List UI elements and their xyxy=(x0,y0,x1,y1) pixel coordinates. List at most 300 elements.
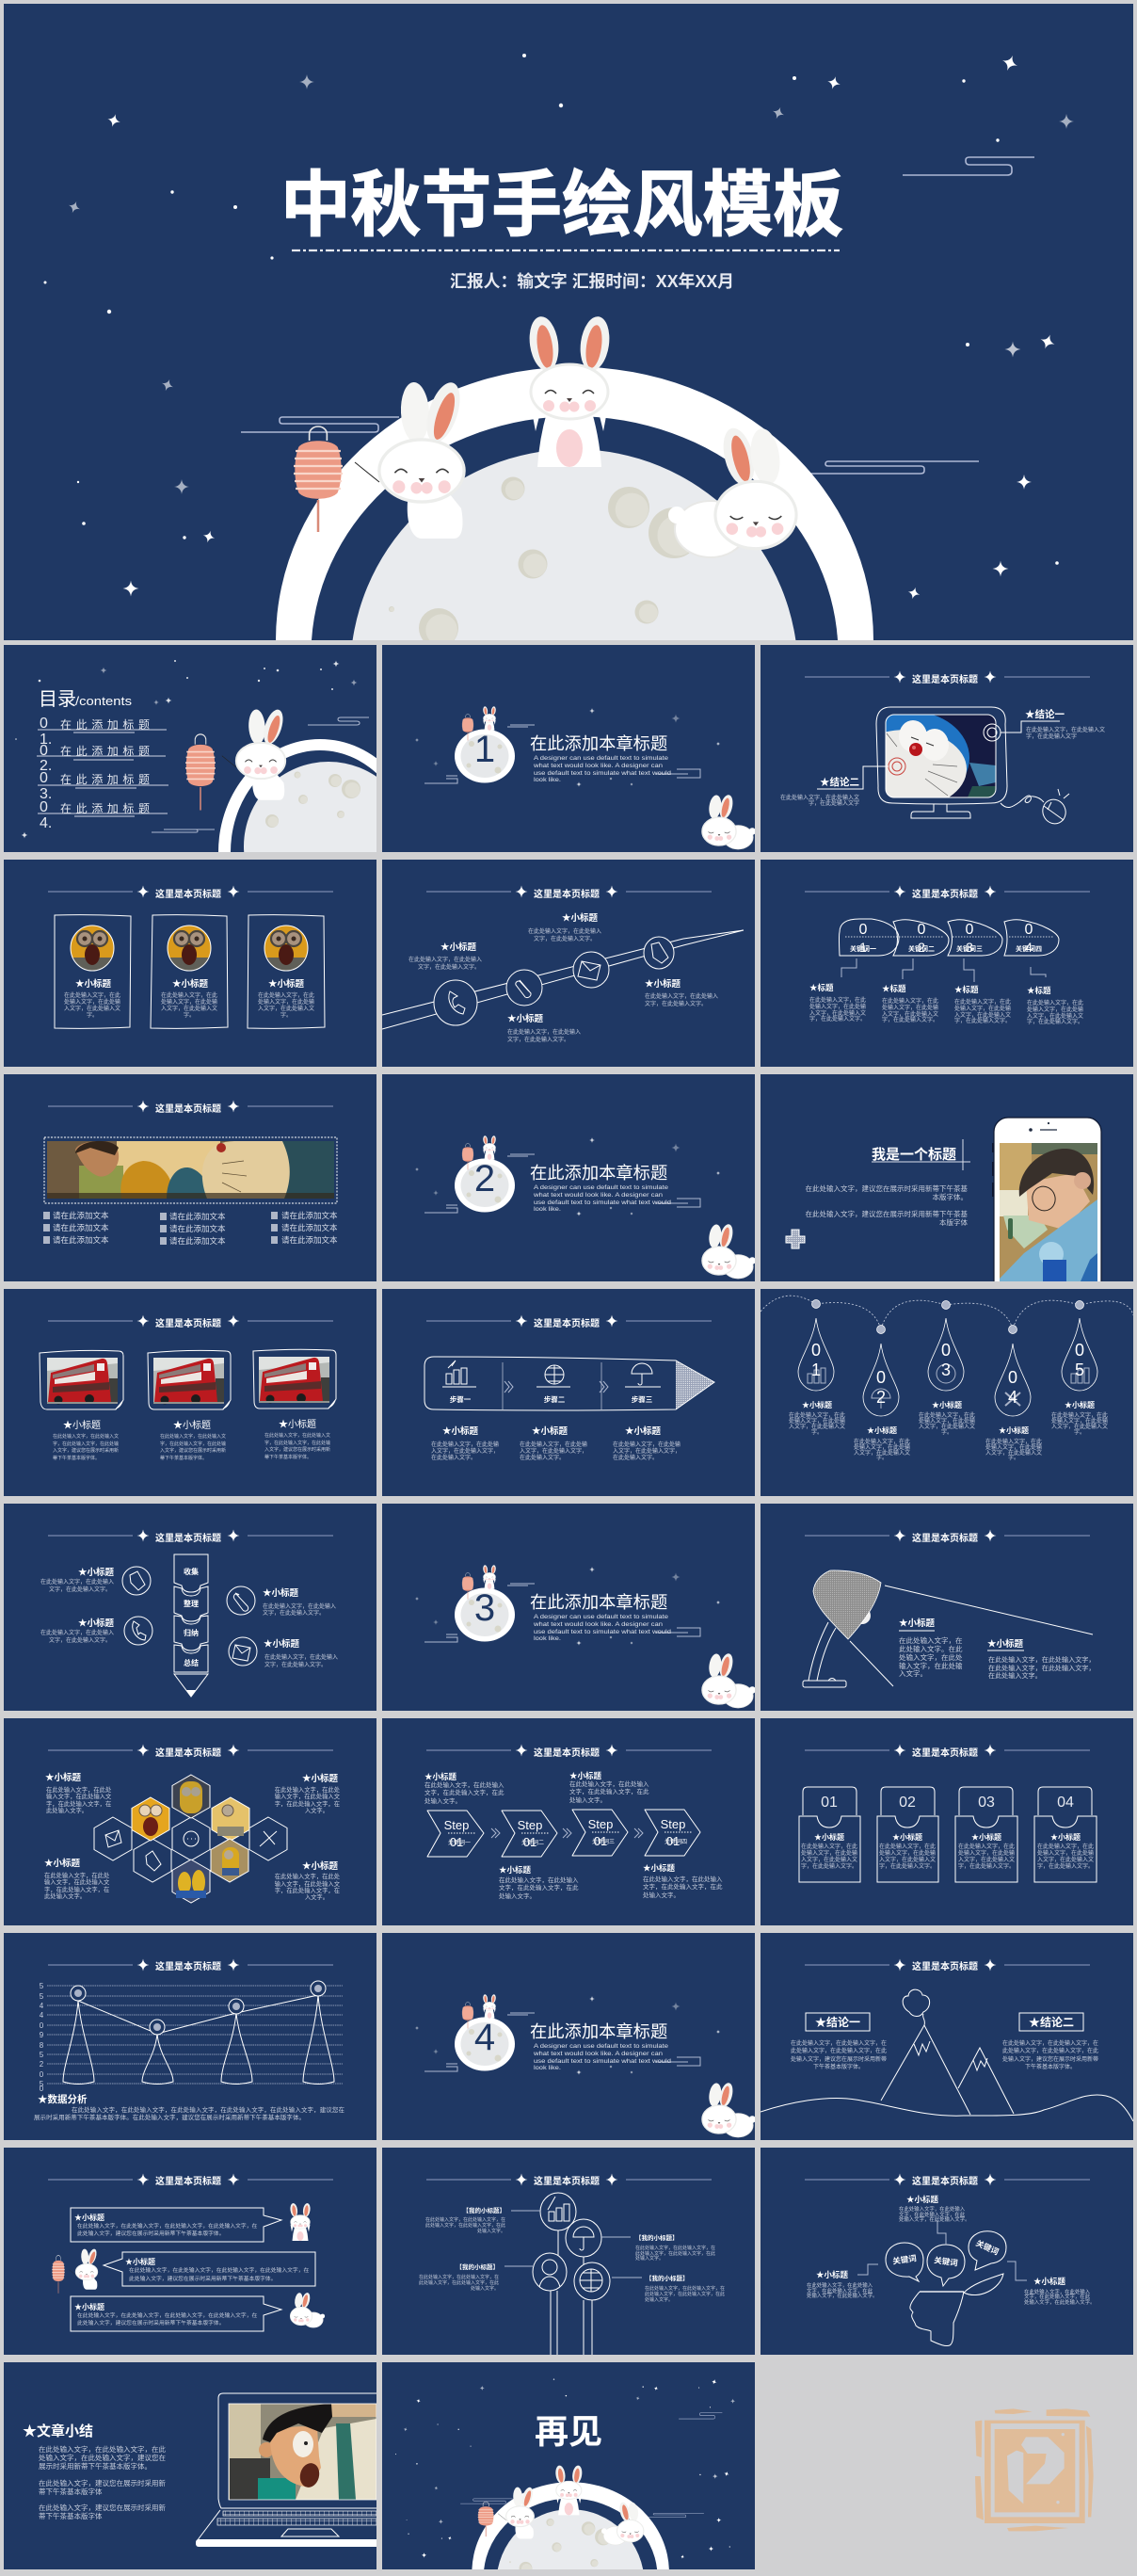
panel: contents xyxy=(4,645,376,852)
summary paragraph 3: 在此处输入文字，建议您在展示时采用新 xyxy=(39,2503,166,2512)
card 1: 字。 xyxy=(87,1011,98,1019)
pocket 4 xyxy=(1034,1787,1097,1882)
keyword bubble 1 xyxy=(886,2243,923,2281)
text block: left: ★小标题 xyxy=(816,2270,849,2279)
text block 1: 文字，在此处输入文字，在此 xyxy=(424,1788,504,1796)
tab labels: 关键词四 xyxy=(1016,944,1042,953)
bullet list: 请在此添加文本 xyxy=(169,1212,226,1221)
label 3 xyxy=(419,2262,499,2292)
tab labels: 0 xyxy=(859,922,868,938)
title dashed line xyxy=(292,250,840,251)
text block 4 xyxy=(643,1863,723,1899)
text block 2: 字，在此处输入文字。 xyxy=(882,1016,938,1023)
heading: 这里是本页标题 xyxy=(912,1960,978,1972)
text block 2 xyxy=(569,1771,649,1804)
heading: 这里是本页标题 xyxy=(155,1317,221,1329)
step 1 text: 入文字，在此处输入文字， xyxy=(431,1447,499,1455)
bubble 1: 在此处输入文字，在此处输入文字，在此处输入文字，在此处输入文字，在 xyxy=(77,2222,258,2230)
callout: conclusion one: 在此处输入文字，在此处输入文 xyxy=(1026,726,1105,733)
conclusion one: 此处输入文字，在此处输入文字，在此 xyxy=(791,2047,887,2054)
section title and description: use default text to simulate what text would xyxy=(534,1199,671,1206)
data analysis text: 展示时采用新蒂下午茶基本版字体。在此处输入文字，建议您在展示时采用新蒂下午茶基本版字体。 xyxy=(34,2113,305,2121)
text block 3: 处输入文字。 xyxy=(499,1892,536,1900)
text block 3: 字，在此处输入文字。 xyxy=(954,1017,1011,1024)
heading xyxy=(805,2173,1090,2187)
panel: hexagon gallery xyxy=(4,1718,376,1925)
cones xyxy=(63,1995,334,2085)
drop 4: 4 xyxy=(1008,1388,1017,1407)
panel: section 3 xyxy=(382,1504,756,1711)
gridlines xyxy=(47,1986,343,2084)
tab labels: 关键词二 xyxy=(908,944,935,953)
caption 3 xyxy=(264,1419,330,1460)
section number: 4 xyxy=(474,2017,495,2058)
caption 3: 入文字，在此处输入文 xyxy=(919,1423,975,1430)
bubble 1 xyxy=(71,2208,281,2242)
text paragraph 1 xyxy=(806,1183,968,1201)
text block 4: ★标题 xyxy=(1027,986,1051,995)
pocket 1: ★小标题 xyxy=(814,1832,844,1842)
step 2 text: 在此处输入文字，在此处输 xyxy=(520,1441,587,1448)
closing illustration xyxy=(382,2362,755,2576)
pocket 2: 02 xyxy=(899,1795,916,1811)
y axis labels: 9 xyxy=(40,2031,44,2039)
caption 2: 处输入文字，在此处输 xyxy=(854,1443,910,1451)
caption 2 xyxy=(160,1420,226,1461)
caption 1 xyxy=(53,1420,119,1461)
trend line xyxy=(78,1995,318,2034)
summary paragraph 2: 蒂下午茶基本版字体 xyxy=(39,2487,103,2496)
label 3: 【我的小标题】 xyxy=(456,2262,499,2271)
contents list: 在此添加标题 xyxy=(60,802,150,815)
section title and description: 在此添加本章标题 xyxy=(530,1592,667,1612)
photo xyxy=(47,1141,334,1199)
step chevron 4: 01 xyxy=(666,1834,680,1848)
bullet list: 请在此添加文本 xyxy=(281,1223,338,1232)
text block 4: 在此处输入文字，在此 xyxy=(1027,999,1083,1006)
tab labels: 关键词一 xyxy=(850,944,876,953)
clouds xyxy=(152,717,369,832)
caption 3 xyxy=(919,1400,975,1436)
pencil shape xyxy=(424,1357,714,1410)
text block 1: 在此处输入文字，在此处输入 xyxy=(424,1780,504,1789)
bubble 2: 在此处输入文字，在此处输入文字，在此处输入文字，在此处输入文字，在 xyxy=(129,2266,310,2274)
text block 3: 入文字，在此处输入文 xyxy=(954,1011,1011,1019)
card 2: 入文字，在此处输入文 xyxy=(161,1005,217,1012)
stems xyxy=(551,2230,592,2355)
text block 1: 输入文字，在此处输 xyxy=(899,1661,963,1670)
bullet list: 请在此添加文本 xyxy=(53,1235,109,1245)
text block 1: ★标题 xyxy=(809,983,834,992)
connector lines xyxy=(504,2211,642,2278)
balloon 3 xyxy=(533,2253,567,2291)
cover illustration: stars, moon and rabbits xyxy=(4,4,1133,897)
data analysis text xyxy=(34,2105,344,2121)
card 2 xyxy=(151,915,228,1028)
caption 2: ★小标题 xyxy=(867,1425,897,1435)
text block: top: 文字，在此处输入文字。 xyxy=(534,935,596,942)
pocket 3 xyxy=(955,1787,1017,1882)
heading: 这里是本页标题 xyxy=(155,1103,221,1115)
bubble 2 xyxy=(104,2252,315,2286)
pocket 4: 处输入文字，在此处输 xyxy=(1037,1849,1094,1857)
card 2: 在此处输入文字，在此 xyxy=(161,991,217,999)
section title and description: what text would look like. A designer can xyxy=(533,763,663,769)
contents list: 0 xyxy=(40,799,48,815)
card 1: 处输入文字，在此处输 xyxy=(64,998,120,1006)
pocket 4: ★小标题 xyxy=(1050,1832,1081,1842)
caption 5 xyxy=(1051,1400,1108,1436)
text block: lower right: 在此处输入文字，在此处输入 xyxy=(264,1653,338,1661)
text block: upper left xyxy=(45,1772,112,1814)
heading xyxy=(48,1314,333,1329)
caption 2: 入文字，建议您在展示时采用新 xyxy=(160,1447,226,1454)
card 3: 字。 xyxy=(280,1011,292,1019)
step 2 text: ★小标题 xyxy=(532,1425,568,1437)
panel: closing slide xyxy=(382,2362,755,2576)
data analysis heading: ★数据分析 xyxy=(38,2093,88,2105)
label 2: 【我的小标题】 xyxy=(635,2233,678,2242)
pocket 1: 入文字，在此处输入文 xyxy=(801,1856,857,1863)
y axis labels: 5 xyxy=(40,2080,44,2088)
drop 2: 2 xyxy=(876,1388,886,1407)
text block: lower left: ★小标题 xyxy=(44,1858,81,1869)
caption 3: ★小标题 xyxy=(932,1400,962,1409)
caption 1: 入文字，建议您在展示时采用新 xyxy=(53,1447,119,1454)
pocket 2: ★小标题 xyxy=(892,1832,922,1842)
step chevron 3 xyxy=(572,1810,628,1856)
drop 3 xyxy=(928,1318,964,1391)
icon circles xyxy=(122,1567,257,1666)
text block: left xyxy=(807,2270,877,2299)
text paragraph 2: 本版字体 xyxy=(939,1217,968,1227)
bullet list: 请在此添加文本 xyxy=(281,1211,338,1220)
rabbit xyxy=(222,707,287,800)
tab labels: 1 xyxy=(859,940,867,955)
caption 1: 在此处输入文字，在此 xyxy=(789,1411,845,1419)
text block: upper right xyxy=(275,1773,341,1814)
drop 2: 0 xyxy=(876,1368,886,1387)
caption 4: ★小标题 xyxy=(999,1425,1029,1435)
text block 2: 在此处输入文字，在此处输入文字， xyxy=(988,1664,1096,1672)
card 2: 处输入文字，在此处输 xyxy=(161,998,217,1006)
caption 3: 处输入文字，在此处输 xyxy=(919,1417,975,1425)
y axis labels: 5 xyxy=(40,1992,44,2001)
step chevron 1: 关键词一 xyxy=(448,1839,471,1846)
text block 4: 在此处输入文字，在此处输入 xyxy=(643,1875,723,1883)
card 3 xyxy=(248,915,325,1028)
icon circles xyxy=(434,937,674,1025)
data analysis text: 在此处输入文字，在此处输入文字，在此处输入文字，在此处输入文字，在此处输入文字，建议您在 xyxy=(72,2105,344,2114)
text block 2: 处输入文字，在此处输 xyxy=(882,1004,938,1011)
text block 4: 字，在此处输入文字。 xyxy=(1027,1018,1083,1025)
text block 4: ★小标题 xyxy=(643,1863,676,1873)
pocket 4: 入文字，在此处输入文 xyxy=(1037,1856,1094,1863)
tab labels: 2 xyxy=(918,940,925,955)
heading: 这里是本页标题 xyxy=(912,2175,978,2187)
outline hexagons xyxy=(94,1817,287,1882)
bubble 3: 在此处输入文字，在此处输入文字，在此处输入文字，在此处输入文字，在 xyxy=(77,2311,258,2319)
phone xyxy=(993,1118,1101,1306)
heading: 这里是本页标题 xyxy=(912,888,978,900)
text block: lower left xyxy=(40,1618,114,1644)
text block: upper left xyxy=(40,1567,114,1593)
heading xyxy=(426,2173,712,2187)
conclusion one: ★结论一 xyxy=(815,2015,860,2029)
panel: pencil steps xyxy=(382,1289,755,1496)
monitor outline xyxy=(876,707,1007,818)
bubble 3 xyxy=(71,2296,281,2331)
pocket 3: 03 xyxy=(978,1795,995,1811)
heading: 这里是本页标题 xyxy=(155,1960,221,1972)
panel: keywords head xyxy=(761,2148,1133,2355)
text block 1: 处输入文字，在此处 xyxy=(899,1652,963,1662)
label 2: 处输入文字。 xyxy=(635,2255,664,2262)
bubble 3: 此处输入文字，建议您在展示时采用新蒂下午茶基本版字体。 xyxy=(77,2319,225,2326)
step chevron 2 xyxy=(502,1811,557,1857)
pencil labels: 整理 xyxy=(184,1599,199,1608)
drop 1: 1 xyxy=(811,1360,821,1379)
section title and description: use default text to simulate what text would xyxy=(534,770,671,777)
contents list: 0 xyxy=(40,716,48,732)
contents list: 1. xyxy=(40,732,52,748)
heading xyxy=(805,1958,1090,1972)
text block: right: 在此处输入文字，在此处输入 xyxy=(1024,2288,1091,2295)
panel: diagonal timeline xyxy=(382,860,755,1067)
text block 1: 处输入文字，在此处输 xyxy=(809,1003,866,1010)
card 1: 在此处输入文字，在此 xyxy=(64,991,120,999)
label 4: 【我的小标题】 xyxy=(646,2274,689,2282)
moon badge and rabbit art xyxy=(415,1135,756,1279)
connectors xyxy=(857,2221,1027,2280)
text block 1: 在此处输入文字，在 xyxy=(899,1635,963,1645)
step 3 text xyxy=(613,1425,681,1461)
section title and description: look like. xyxy=(534,2065,561,2071)
caption 1: 入文字，在此处输入文 xyxy=(789,1423,845,1430)
label 2: 在此处输入文字，在此处输入文字，在 xyxy=(635,2245,715,2251)
text block 2 xyxy=(987,1638,1096,1680)
bubble 1: ★小标题 xyxy=(74,2213,104,2222)
summary paragraph 2: 在此处输入文字，建议您在展示时采用新 xyxy=(39,2478,166,2487)
diagonal spear lines xyxy=(382,930,744,1029)
section title and description xyxy=(530,1163,671,1213)
panel: section 2 xyxy=(382,1074,756,1281)
summary paragraph 1: 处输入文字，在此处输入文字，建议您在 xyxy=(39,2453,166,2462)
caption 1: ★小标题 xyxy=(802,1400,832,1409)
pencil labels: 归纳 xyxy=(184,1628,199,1637)
step chevron 4: 关键词四 xyxy=(665,1838,687,1845)
text block 3: ★标题 xyxy=(954,985,979,994)
text paragraph 2 xyxy=(806,1209,968,1227)
pocket 2: 字，在此处输入文字。 xyxy=(879,1862,936,1870)
text block: right xyxy=(645,978,718,1007)
text block: bottom: ★小标题 xyxy=(507,1013,544,1024)
bubble 3: ★小标题 xyxy=(74,2302,104,2311)
y axis labels: 5 xyxy=(40,1982,44,1990)
section title and description: look like. xyxy=(534,777,561,783)
step 2 icon and label xyxy=(536,1365,570,1404)
card 1: 入文字，在此处输入文 xyxy=(64,1005,120,1012)
text block: top: 在此处输入文字，在此处输入 xyxy=(899,2205,966,2213)
caption 4: 入文字，在此处输入文 xyxy=(985,1449,1042,1457)
callout: conclusion one xyxy=(1025,708,1105,740)
text block: top xyxy=(899,2195,969,2223)
text block: lower right: 在此处输入文字，在此处 xyxy=(275,1872,341,1880)
heading xyxy=(805,670,1090,684)
step 1 text: ★小标题 xyxy=(442,1425,479,1437)
section title and description: look like. xyxy=(534,1206,561,1213)
text block: top: 在此处输入文字，在此处输入 xyxy=(528,927,601,935)
y axis labels: 0 xyxy=(40,2021,44,2030)
text block: lower left: 此处输入文字。 xyxy=(44,1892,86,1900)
caption 2: 在此处输入文字，在此 xyxy=(854,1438,910,1445)
heading: 这里是本页标题 xyxy=(155,1532,221,1544)
text block: right: 文字，在此处输入文字，在此 xyxy=(1024,2293,1091,2300)
moon arch xyxy=(218,739,376,852)
heading xyxy=(48,1529,333,1544)
text block: lower right: 输入文字，在此处输入文 xyxy=(275,1879,341,1888)
step 3 text: 在此处输入文字。 xyxy=(613,1454,658,1461)
caption 1: 字，在此处输入文字，在此处输 xyxy=(53,1441,119,1447)
card 3: ★小标题 xyxy=(268,978,304,990)
heading xyxy=(805,1744,1090,1759)
bullet list: 请在此添加文本 xyxy=(169,1236,226,1246)
panel: wide photo xyxy=(4,1074,376,1281)
step 1 text: 在此处输入文字，在此处输 xyxy=(431,1441,499,1448)
lantern xyxy=(294,427,343,532)
caption 2: 字。 xyxy=(876,1454,888,1461)
heading: 这里是本页标题 xyxy=(534,1747,600,1759)
caption 2: 在此处输入文字，在此处输入文 xyxy=(160,1433,226,1440)
text block: right xyxy=(1024,2277,1095,2306)
tab labels: 0 xyxy=(1025,922,1033,938)
text block: lower right: ★小标题 xyxy=(302,1860,338,1872)
conclusion one: 处输入文字，建议您在展示时采用新蒂 xyxy=(791,2055,887,2063)
card 1 xyxy=(55,915,131,1028)
panel: step chevrons xyxy=(382,1718,755,1925)
panel: three avatar cards xyxy=(4,860,376,1067)
panel: section 1 xyxy=(382,645,756,852)
pocket 3: 处输入文字，在此处输 xyxy=(958,1849,1015,1857)
summary heading: ★文章小结 xyxy=(23,2423,93,2439)
caption 2: 入文字，在此处输入文 xyxy=(854,1449,910,1457)
conclusion two xyxy=(1002,2013,1098,2070)
step 3 icon and label xyxy=(625,1363,661,1404)
step 3 text: 入文字，在此处输入文字， xyxy=(613,1447,681,1455)
step chevron 1: Step xyxy=(444,1818,469,1832)
caption 1 xyxy=(789,1400,845,1436)
heading xyxy=(48,1958,333,1972)
section number: 2 xyxy=(474,1158,495,1199)
text block: lower left xyxy=(44,1858,110,1900)
text block: upper right: 字，在此处输入文字，在 xyxy=(275,1799,340,1808)
icon: plus xyxy=(786,1230,805,1248)
text block 4: 文字，在此处输入文字，在此 xyxy=(643,1882,723,1891)
contents list: 在此添加标题 xyxy=(60,745,150,758)
callout: conclusion two: 字，在此处输入文字 xyxy=(809,799,859,807)
panel: data chart xyxy=(4,1933,376,2140)
y axis labels: 4 xyxy=(40,2002,44,2010)
card 2: ★小标题 xyxy=(172,978,208,990)
label 4: 此处输入文字，在此处输入文字，在此 xyxy=(645,2291,725,2297)
summary paragraph 1: 在此处输入文字，在此处输入文字，在此 xyxy=(39,2444,166,2454)
text block: right: 处输入文字，在此处输入文字。 xyxy=(1024,2298,1095,2306)
pocket 3: 字，在此处输入文字。 xyxy=(958,1862,1015,1870)
text block 2 xyxy=(882,984,938,1023)
panel: article summary xyxy=(4,2362,384,2569)
pocket 3: 在此处输入文字，在此 xyxy=(958,1843,1015,1850)
text paragraph 1: 本版字体。 xyxy=(932,1192,968,1201)
text block: left: ★小标题 xyxy=(440,942,477,953)
text block: upper right: 入文字。 xyxy=(305,1806,328,1814)
heading with corner lines xyxy=(872,1139,970,1170)
label 3: 在此处输入文字，在此处输入文字，在 xyxy=(419,2274,499,2280)
text block: upper left: ★小标题 xyxy=(45,1772,82,1783)
caption 2: 蒂下午茶基本版字体。 xyxy=(160,1455,207,1461)
drop 5 xyxy=(1062,1318,1097,1391)
stamp logo xyxy=(975,2408,1094,2531)
step chevron 3: 01 xyxy=(594,1834,607,1848)
balloon 4 xyxy=(574,2262,610,2300)
conclusion two: 在此处输入文字，在此处输入文字，在 xyxy=(1002,2039,1098,2047)
text block 3: 文字，在此处输入文字，在此 xyxy=(499,1883,579,1892)
step chevron 4 xyxy=(645,1810,700,1856)
text block 2: 在此处输入文字，在此处输入 xyxy=(569,1779,649,1788)
label 1 xyxy=(425,2206,505,2234)
text block 1: 字，在此处输入文字。 xyxy=(809,1015,866,1022)
pocket 4: 字，在此处输入文字。 xyxy=(1037,1862,1094,1870)
heading: 这里是本页标题 xyxy=(534,888,600,900)
pocket 1: 字，在此处输入文字。 xyxy=(801,1862,857,1870)
rabbit: left xyxy=(355,378,466,539)
text block: upper left: 字，在此处输入文字，在 xyxy=(46,1799,111,1808)
drop 4 xyxy=(995,1344,1031,1416)
conclusion two: 处输入文字，建议您在展示时采用新蒂 xyxy=(1002,2055,1098,2063)
step 1 icon and label: 步骤一 xyxy=(450,1394,472,1404)
cover title: 中秋节手绘风模板 xyxy=(280,166,843,246)
caption 5: 入文字，在此处输入文 xyxy=(1051,1423,1108,1430)
caption 5: 字。 xyxy=(1074,1428,1085,1436)
drop 5: 5 xyxy=(1075,1360,1084,1379)
contents list: 在此添加标题 xyxy=(60,718,150,732)
caption 5: 在此处输入文字，在此 xyxy=(1051,1411,1108,1419)
heading xyxy=(48,1100,333,1115)
label 1: 在此处输入文字，在此处输入文字，在 xyxy=(425,2216,505,2223)
text block 3 xyxy=(499,1865,579,1900)
balloon 2 xyxy=(566,2219,601,2257)
text block: upper right: ★小标题 xyxy=(302,1773,338,1784)
caption 1: 处输入文字，在此处输 xyxy=(789,1417,845,1425)
step 1 text xyxy=(431,1425,499,1461)
text block: upper left: 在此处输入文字，在此处 xyxy=(46,1785,112,1794)
doraemon photo xyxy=(887,716,996,797)
text block 1: ★小标题 xyxy=(899,1618,936,1629)
rabbit 2 with lantern xyxy=(52,2248,98,2294)
caption 3: 在此处输入文字，在此 xyxy=(919,1411,975,1419)
tab labels: 3 xyxy=(966,940,973,955)
text block: left: 处输入文字，在此处输入文字。 xyxy=(807,2292,877,2299)
step 2 icon and label: 步骤二 xyxy=(544,1394,566,1404)
text block 4: 处输入文字。 xyxy=(643,1891,680,1899)
step 1 text: 在此处输入文字。 xyxy=(431,1454,476,1461)
photo card 3 xyxy=(253,1349,336,1409)
step chevron 3: 关键词三 xyxy=(592,1838,615,1845)
text block 2: 入文字，在此处输入文 xyxy=(882,1010,938,1018)
section title and description xyxy=(530,1592,671,1642)
pencil labels xyxy=(184,1567,199,1667)
card 3: 处输入文字，在此处输 xyxy=(258,998,314,1006)
text block 1: 此处输入文字。在此 xyxy=(899,1644,963,1653)
